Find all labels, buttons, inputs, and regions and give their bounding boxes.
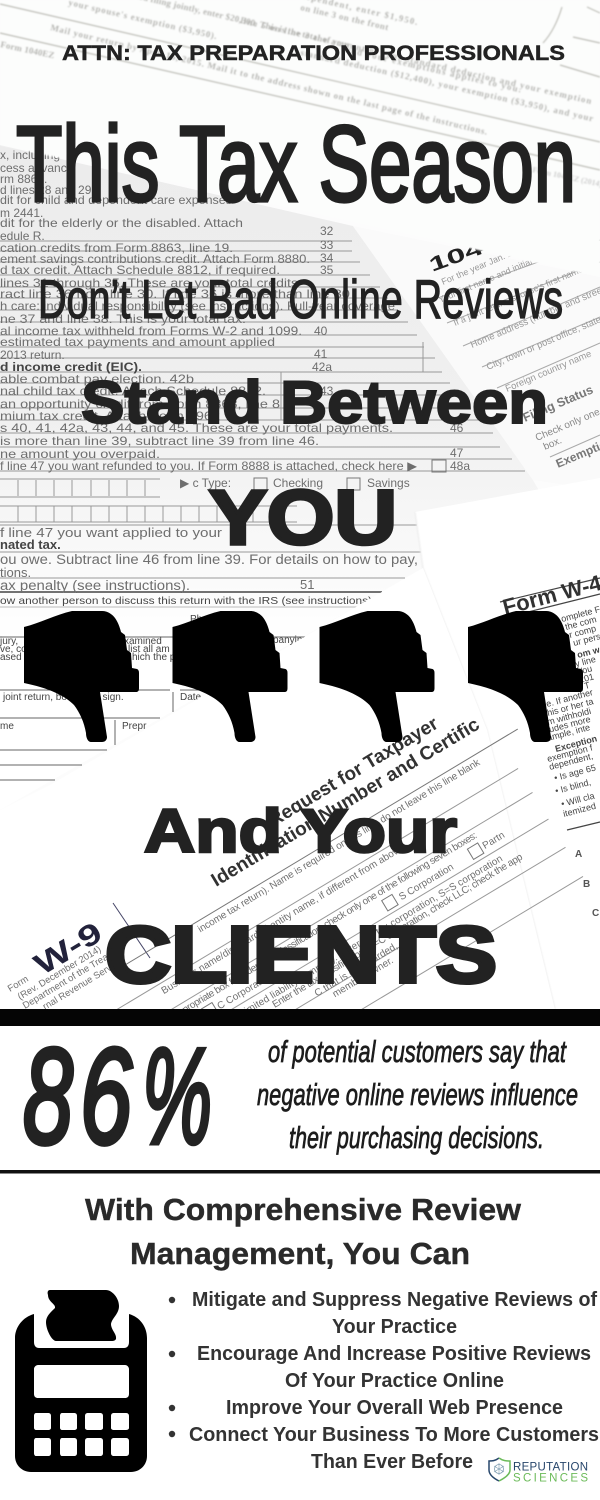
1040 form sheet, left: list all am xyxy=(128,644,170,655)
list item 1 xyxy=(192,1289,597,1338)
1040 form sheet, left: ▶ c Type: xyxy=(180,476,231,490)
1040 form sheet, left: ow another person to discuss this return with the IRS (see instructions) xyxy=(0,595,372,607)
W-4 form sheet: itemized xyxy=(562,801,597,819)
top document sheet: on line 3 on the front xyxy=(300,2,389,32)
list item 2: Encourage And Increase Positive Reviews xyxy=(197,1343,591,1365)
icon: calculator xyxy=(15,1290,147,1472)
1040 form sheet, left: 42a xyxy=(312,360,332,374)
W-9 form sheet: Business name/disregarded entity name, if different from above xyxy=(160,843,406,997)
bullet points xyxy=(169,1297,175,1437)
divider band xyxy=(0,1170,600,1174)
W-4 form sheet: • Is age 65 xyxy=(553,762,597,783)
black band xyxy=(0,1009,600,1026)
1040 form sheet, left: 34 xyxy=(320,251,334,265)
1040 form sheet, left: me xyxy=(0,721,14,732)
W-9 form sheet: Request for Taxpayer xyxy=(265,713,443,831)
1040 form sheet, left: d lines 28 and 29. xyxy=(0,183,95,197)
1040 form sheet, left: mium tax credit. Attach Form 8962 xyxy=(0,409,220,423)
1040 form sheet, left: estimated tax payments and amount applied xyxy=(0,335,275,349)
1040 form sheet, left: s 40, 41, 42a, 43, 44, and 45. These are your total payments. xyxy=(0,421,393,435)
W-4 form sheet: Exception xyxy=(554,733,598,754)
1040 form sheet, left: dit for child and dependent care expenses xyxy=(0,193,232,207)
W-9 form sheet: Identification Number and Certific xyxy=(208,714,484,891)
1040 form sheet, right: If a joint return, spouse's first name xyxy=(452,264,584,328)
top document sheet: line 5 on line 3 the amount of your standard deduction and your exemption xyxy=(240,15,593,106)
1040 form sheet, left: m 2441. xyxy=(0,206,43,220)
top document sheet xyxy=(0,0,600,277)
list item 4 xyxy=(189,1424,599,1473)
1040 form sheet, left: h care: individual responsibility (see instructions). Full-year coverage xyxy=(0,299,395,313)
W-9 form sheet: C that is disregarded, do xyxy=(313,933,412,999)
1040 form sheet, left: 33 xyxy=(320,238,334,252)
list item 4: Connect Your Business To More Customers xyxy=(189,1424,599,1446)
1040 form sheet, left: 41 xyxy=(314,347,328,361)
W-4 form sheet: ludes more xyxy=(546,714,592,735)
1040 form sheet, left: nal child tax credit. Attach Schedule 8812. xyxy=(0,384,266,398)
headline: attn: ATTN: TAX PREPARATION PROFESSIONALS xyxy=(62,41,565,65)
W-4 form sheet xyxy=(415,478,600,1010)
icon: thumb down 1 xyxy=(24,611,139,742)
W-4 form sheet: d T xyxy=(576,680,591,693)
1040 form sheet, left: ax penalty (see instructions). xyxy=(0,578,190,593)
1040 form sheet, left: an opportunity credit from Form 8863, line 8 xyxy=(0,397,280,411)
W-9 form sheet: S Corporation xyxy=(397,862,456,903)
W-9 form sheet: Form xyxy=(6,974,31,995)
1040 form sheet, left: xamined xyxy=(124,636,162,647)
1040 form sheet, left: ement savings contributions credit. Attach Form 8880. xyxy=(0,252,310,266)
top document sheet: standard deduction ($12,400), your exemption ($3,950), and your xyxy=(300,47,594,123)
W-9 form sheet: Partn xyxy=(481,830,507,852)
1040 form sheet, left xyxy=(0,145,600,810)
1040 form sheet, left: Checking xyxy=(273,476,323,490)
icon: shield xyxy=(489,1458,510,1481)
logo: reputation sciences xyxy=(489,1458,588,1484)
icon: thumb down 3 xyxy=(320,611,434,742)
list item 2: Of Your Practice Online xyxy=(285,1370,504,1392)
headline: stand between: Stand Between xyxy=(81,369,548,436)
1040 form sheet, left: x, including xyxy=(0,148,60,162)
1040 form sheet, left: hich the p xyxy=(132,652,176,663)
list: benefits xyxy=(169,1289,599,1473)
W-4 form sheet: r comp xyxy=(568,623,597,640)
1040 form sheet, left: 51 xyxy=(300,577,314,592)
list item 1: Your Practice xyxy=(332,1316,457,1338)
1040 form sheet, right xyxy=(353,226,600,490)
W-4 form sheet: • Will cla xyxy=(560,791,596,809)
1040 form sheet, left: nated tax. xyxy=(0,537,61,552)
background: tax form photograph xyxy=(0,0,600,1175)
list item 2 xyxy=(197,1343,591,1392)
1040 form sheet, left: panyin xyxy=(273,635,302,646)
W-4 form sheet: omplete F xyxy=(560,604,600,624)
1040 form sheet, left: d income credit (EIC). xyxy=(0,360,142,374)
1040 form sheet, left: ne 37 and line 38. This is your total tax. xyxy=(0,312,246,326)
1040 form sheet, left: is more than line 39, subtract line 39 from line 46. xyxy=(0,434,319,448)
panel: statistic xyxy=(0,1009,600,1500)
1040 form sheet, left: jury, xyxy=(0,636,18,647)
1040 form sheet, left: ve, co xyxy=(0,644,27,655)
1040 form sheet, left: 40 xyxy=(314,324,328,338)
W-4 form sheet: e. If another xyxy=(545,687,594,709)
1040 form sheet, right: box. xyxy=(542,435,564,453)
1040 form sheet, left: ased xyxy=(0,652,22,663)
1040 form sheet, right: Check only one xyxy=(534,407,600,444)
1040 form sheet, left: 48a xyxy=(450,459,470,473)
W-4 form sheet: B xyxy=(583,879,590,890)
top document sheet: Mail your return by April 15, 2015. Mail it to the address shown on the last page of the instructions. xyxy=(50,22,488,137)
list item 4: Than Ever Before xyxy=(311,1451,473,1473)
headline: clients: CLIENTS xyxy=(105,910,497,999)
W-9 form sheet: income tax return). Name is required on this line; do not leave this line blank xyxy=(196,757,483,935)
W-9 form sheet: Individual/sole proprietor or Limited liability company. Enter the tax corporation, S=S corporation xyxy=(131,853,505,1084)
1040 form sheet, left: ract line 36 from line 30. If line 36 is more than line 30 xyxy=(0,287,350,301)
1040 form sheet, left: Savings xyxy=(367,476,410,490)
heading: comprehensive review management xyxy=(85,1192,522,1271)
1040 form sheet, left: 46 xyxy=(450,421,464,435)
logo: reputation sciences: REPUTATION xyxy=(513,1462,588,1474)
1040 form sheet, left: ne amount you overpaid. xyxy=(0,447,160,461)
W-4 form sheet: • Is blind, xyxy=(554,777,592,796)
icon: thumb down 2 xyxy=(172,611,288,742)
heading: comprehensive review management: Management, You Can xyxy=(130,1236,470,1271)
W-4 form sheet: C xyxy=(592,908,599,919)
W-4 form sheet: the com xyxy=(564,614,597,632)
W-9 form sheet: Department of the Treasury xyxy=(21,942,126,1012)
1040 form sheet, left: 47 xyxy=(450,446,464,460)
W-4 form sheet: 201 xyxy=(578,671,595,685)
sheet shadow edges xyxy=(415,512,555,1009)
top document sheet: and your exemptions applies to you. xyxy=(345,44,522,94)
icon: thumb down 4 xyxy=(468,611,583,742)
top document sheet: Form 1040EZ xyxy=(0,39,55,60)
1040 form sheet, left: lines 31 through 35. These are your total credits xyxy=(0,276,298,290)
1040 form sheet, left: able combat pay election. 42b xyxy=(0,372,194,386)
W-9 form sheet: Check appropriate box for federal tax classification; check only one of the following seven boxes: xyxy=(148,830,479,1035)
W-4 form sheet: y line xyxy=(574,654,597,669)
W-4 form sheet: his or her ta xyxy=(546,696,594,718)
1040 form sheet, left: tions. xyxy=(0,565,31,580)
1040 form sheet, left: 32 xyxy=(320,224,334,238)
headline: and your: And Your xyxy=(144,797,457,865)
W-9 form sheet: C Corporation xyxy=(216,971,275,1012)
W-9 form sheet: (Rev. December 2014) xyxy=(16,944,103,1003)
1040 form sheet, left: Date xyxy=(180,692,202,703)
1040 form sheet, right: 104 xyxy=(426,236,488,277)
1040 form sheet, left: rm 8862. xyxy=(0,172,47,186)
1040 form sheet, right: Filing Status xyxy=(521,383,595,425)
W-9 form sheet: member owner. xyxy=(331,955,396,1000)
statistic number: 6 xyxy=(80,1020,132,1172)
W-9 form sheet: Enter the tax classification (C=C corporation, check LLC; check the app xyxy=(271,852,525,1011)
W-9 form sheet xyxy=(0,568,600,1175)
1040 form sheet, left: Ph xyxy=(190,614,202,625)
1040 form sheet, right: Foreign country name xyxy=(504,349,593,395)
1040 form sheet, left: 2013 return. xyxy=(0,348,65,362)
1040 form sheet, left: joint return, both must sign. xyxy=(2,692,124,703)
1040 form sheet, left: ou owe. Subtract line 46 from line 39. For details on how to pay, xyxy=(0,552,418,567)
W-9 form sheet: rnal Revenue Service xyxy=(41,956,124,1013)
W-4 form sheet: exemption f xyxy=(546,742,594,764)
1040 form sheet, left: 35 xyxy=(320,263,334,277)
statistic text xyxy=(257,1034,578,1155)
1040 form sheet, left: edule R. xyxy=(0,229,45,243)
icons: four thumbs down xyxy=(24,611,583,742)
list item 1: Mitigate and Suppress Negative Reviews of xyxy=(192,1289,597,1311)
1040 form sheet, left: Prepr xyxy=(122,721,147,732)
statistic number: % xyxy=(142,1020,212,1172)
statistic number xyxy=(23,1020,212,1172)
1040 form sheet, left: d tax credit. Attach Schedule 8812, if required. xyxy=(0,263,280,277)
heading: comprehensive review management: With Comprehensive Review xyxy=(85,1192,522,1227)
W-4 form sheet: dependent, xyxy=(548,751,594,772)
1040 form sheet, left: cess advance xyxy=(0,161,74,175)
1040 form sheet, left: dit for the elderly or the disabled. Attach xyxy=(0,216,243,230)
headline: you: YOU xyxy=(209,475,397,561)
W-4 form sheet: You xyxy=(576,663,593,677)
statistic number: 8 xyxy=(23,1020,73,1172)
W-4 form sheet: ample, inte xyxy=(546,722,591,743)
logo: reputation sciences: SCIENCES xyxy=(513,1472,588,1484)
W-4 form sheet: A xyxy=(575,849,582,860)
1040 form sheet, left: 43 xyxy=(320,384,334,398)
W-4 form sheet: m withholdi xyxy=(546,706,592,727)
W-9 form title: W-9 xyxy=(29,916,108,982)
1040 form sheet, left: cation credits from Form 8863, line 19. xyxy=(0,241,233,255)
1040 form sheet, right: Your first name and initial xyxy=(437,256,534,305)
1040 form sheet, left: f line 47 you want applied to your xyxy=(0,525,223,540)
1040 form sheet, left: f line 47 you want refunded to you. If Form 8888 is attached, check here ▶ xyxy=(0,459,418,473)
list item 3: Improve Your Overall Web Presence xyxy=(226,1397,563,1419)
1040 form sheet, right: For the year Jan. 1-Dec xyxy=(440,241,531,287)
1040 form sheet, left: al income tax withheld from Forms W-2 and 1099. xyxy=(0,324,302,338)
